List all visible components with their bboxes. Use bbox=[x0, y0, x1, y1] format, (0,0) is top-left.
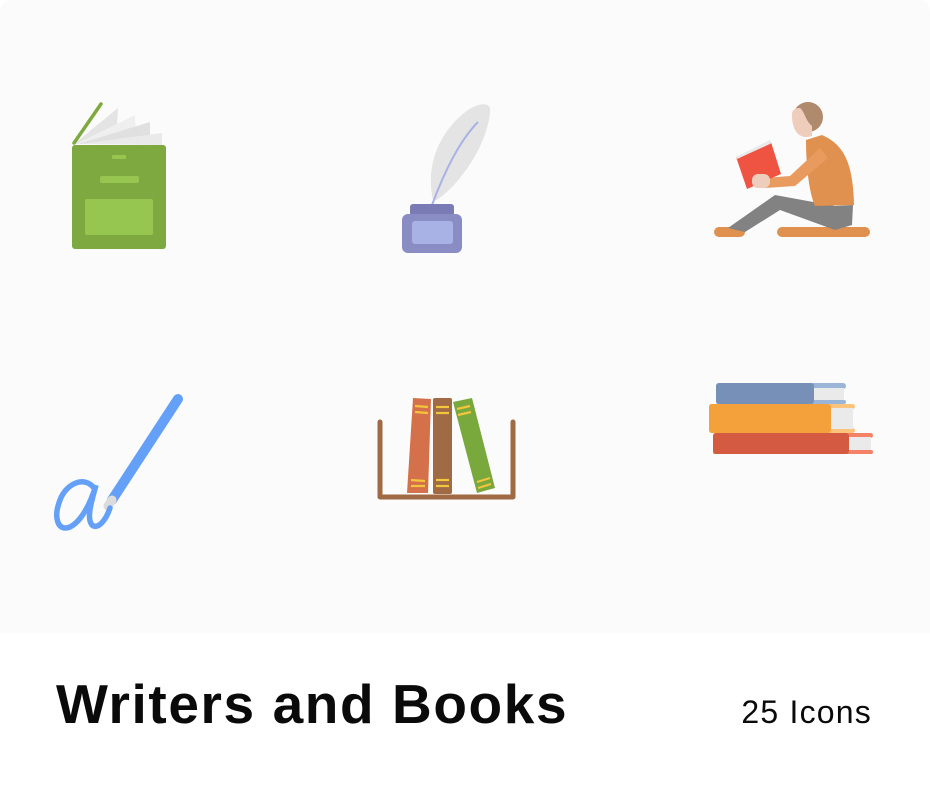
icon: bookshelf bbox=[380, 398, 513, 497]
title: Writers and Books bbox=[56, 673, 568, 735]
icon: green book bbox=[72, 104, 166, 249]
icon: pen writing a bbox=[57, 399, 178, 528]
icon: quill and inkwell bbox=[402, 104, 490, 253]
icon: stack of books bbox=[709, 383, 873, 454]
icon count label: 25 Icons bbox=[741, 694, 872, 730]
icon: person reading bbox=[714, 102, 870, 237]
